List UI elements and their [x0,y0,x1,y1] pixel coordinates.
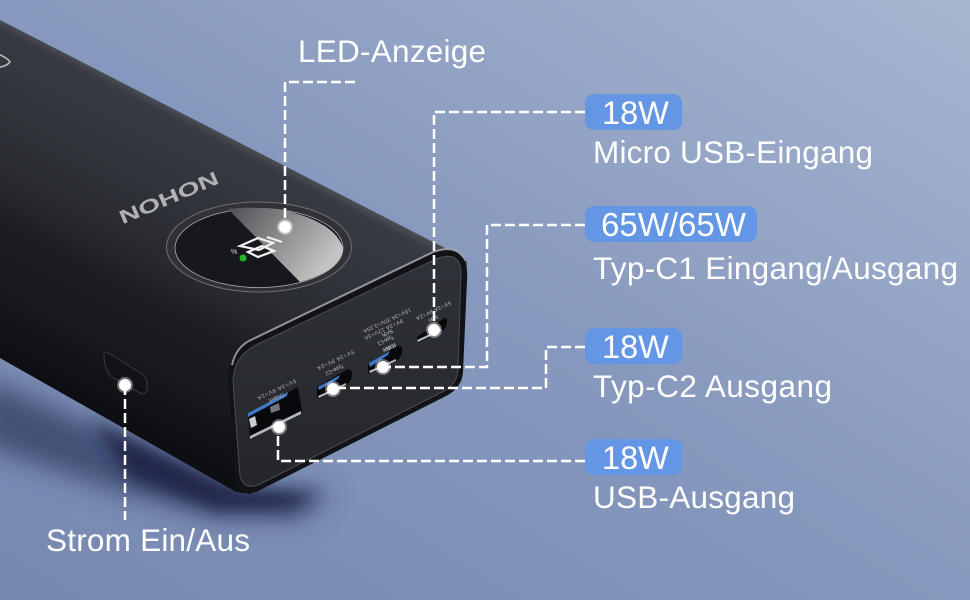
leader: Typ-C1 [383,225,585,367]
leader: Typ-C2 [335,347,585,388]
port spec labels: 5V=3A [380,327,394,338]
body surface [0,20,467,494]
leader: Strom [124,385,126,520]
drop shadow under power bank [0,375,335,518]
port spec labels: PD 65W [381,341,397,353]
callout: Typ-C2 Ausgang [585,328,832,404]
callout: Typ-C2 Ausgang: 18W [602,329,669,365]
connector dots [117,219,442,435]
callout: USB-Ausgang: 18W [602,440,669,476]
port spec labels: Micro [427,313,439,323]
port spec labels: 9V=3A 12V=3A [363,317,404,341]
face top highlight [232,249,464,365]
callout: Micro USB-Eingang: Micro USB-Eingang [593,134,873,170]
port spec labels: 5V=3A 9V=2A [316,348,355,371]
callout: Typ-C1 Eingang/Ausgang: Typ-C1 Eingang/Ausgang [593,250,958,286]
callout: Micro USB-Eingang [585,94,873,170]
port spec labels: Type-C2 [324,362,345,376]
NOHON logo: NOHON [115,166,221,227]
leader lines [125,82,585,520]
port spec labels: Type-C1 [376,333,395,346]
USB-C port 2 [317,370,352,398]
callout: USB-Ausgang [585,439,795,515]
port spec labels: 15V=3A 20V=3.25A [362,306,412,334]
leader: Micro USB [434,112,585,330]
leader: USB-Ausgang [278,427,585,461]
LED display disc [166,202,352,292]
callout: USB-Ausgang: USB-Ausgang [593,479,795,515]
label: LED-Anzeige: LED-Anzeige [298,33,486,69]
port spec labels: 5V=3A 9V=2A [414,299,452,321]
label: Strom Ein/Aus: Strom Ein/Aus [46,522,250,558]
charging indicator [240,254,246,262]
port spec labels [256,299,452,404]
LED digits [240,237,282,257]
callout: Typ-C2 Ausgang: Typ-C2 Ausgang [593,368,832,404]
callout: Micro USB-Eingang: 18W [602,95,669,131]
callout: Typ-C1 Eingang/Ausgang: 65W/65W [601,206,747,243]
micro USB port [417,318,447,342]
leader: LED-Anzeige [285,82,355,227]
USB-A port [248,387,302,439]
front face [228,249,467,493]
port spec labels: 5V=3A 9V=2A [256,377,297,401]
corner logo mark [0,52,10,68]
power bank [0,20,467,494]
port spec labels: Output [267,391,285,404]
USB-C port 1 [368,346,402,374]
power button [104,352,147,394]
percent sign: % [231,249,237,256]
callout: Typ-C1 Eingang/Ausgang [585,206,958,286]
